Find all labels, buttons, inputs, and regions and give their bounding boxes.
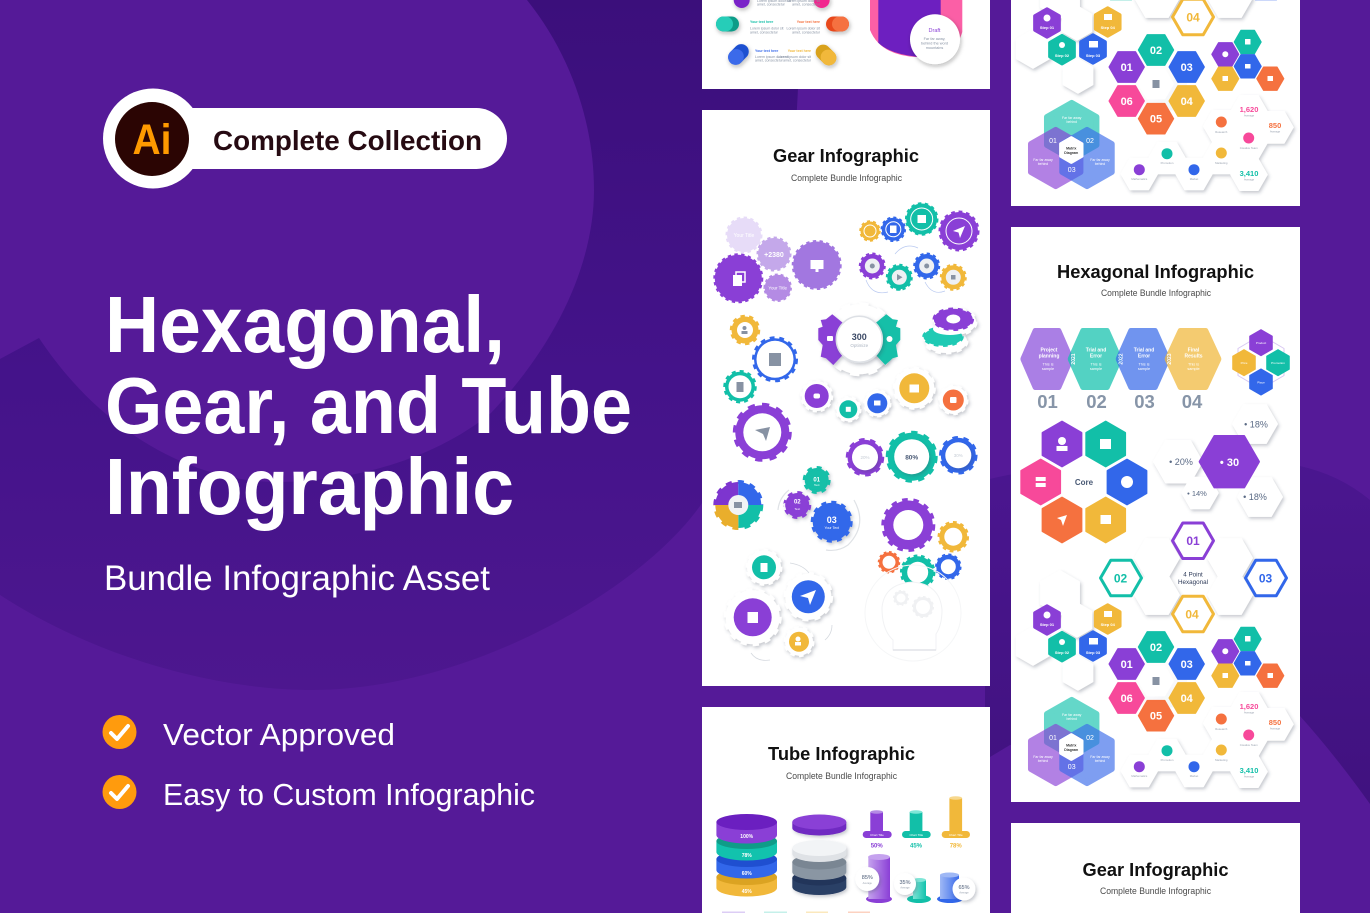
heading: Gear Infographic (773, 146, 919, 166)
timeline hexagons: planning (1039, 354, 1059, 360)
capsule captions: Your text here (755, 49, 778, 53)
gear set: head thinking (865, 500, 967, 661)
gear row: white gears with colour dots (802, 368, 967, 421)
percent hexagons: • 14% (1187, 489, 1207, 498)
title (105, 280, 632, 531)
panel: cropped hexagonal card (1011, 0, 1300, 206)
title: Hexagonal, (105, 280, 505, 369)
capsule captions: amet, consectetur (783, 58, 812, 62)
step hexagons (1017, 0, 1120, 93)
title: Infographic (105, 442, 514, 531)
matrix diagram: Far far away (1090, 158, 1110, 162)
stat hexagons (1121, 96, 1293, 190)
stat hexagons: Average (1244, 710, 1255, 714)
numbered hexagons: 02 (1150, 642, 1162, 654)
matrix diagram: 01 (1049, 138, 1057, 145)
gear set: 01 02 03: 02 (794, 500, 801, 506)
heading: Hexagonal Infographic (1057, 262, 1254, 282)
timeline numbers: 01 (1037, 391, 1058, 412)
small tube: 50%: 50% (871, 844, 883, 850)
badge: Complete Collection (103, 88, 507, 188)
step hexagons: Step 03 (1086, 650, 1101, 655)
4 point hexagonal: 03 (1259, 572, 1272, 586)
4 point hexagonal: Hexagonal (1178, 579, 1208, 586)
4 point hexagonal: 04 (1185, 608, 1199, 622)
timeline hexagons: Final (1188, 348, 1200, 354)
timeline hexagons: Project (1041, 348, 1058, 354)
timeline hexagons: Results (1184, 354, 1203, 360)
matrix diagram (1031, 103, 1112, 186)
timeline numbers: 03 (1134, 391, 1155, 412)
tube stack: colour (716, 814, 777, 896)
step hexagons: Step 02 (1055, 53, 1070, 58)
hexagon ring diagram: Promotion (1271, 361, 1285, 365)
timeline hexagons: 2021 (1071, 353, 1077, 365)
numbered hexagons: 01 (1121, 659, 1133, 671)
capsule captions: amet, consectetur (792, 2, 821, 6)
stat hexagons: 3,410 (1240, 766, 1258, 775)
timeline hexagons: 2023 (1167, 353, 1173, 365)
stat hexagons: 1,620 (1240, 105, 1258, 114)
hexagon ring diagram: Place (1257, 380, 1265, 384)
gear cluster: faded purple: Your Title (768, 286, 787, 290)
icon: Ai logo (115, 102, 189, 176)
gear: blue building (754, 338, 796, 380)
timeline hexagons: This is (1091, 362, 1102, 366)
gear: 3D stacked (924, 309, 976, 353)
hexagon ring diagram (1233, 330, 1289, 395)
callout: Draft: Far far away, (924, 37, 945, 41)
gear row: percentages: 80% (905, 454, 918, 462)
step hexagons: Step 04 (1101, 622, 1116, 627)
small tube: 45% (902, 810, 931, 850)
percent hexagons: • 30 (1220, 457, 1239, 469)
small tube: 78%: 78% (950, 844, 962, 850)
subheading: Complete Bundle Infographic (791, 173, 902, 183)
timeline hexagons: Trial and (1086, 348, 1106, 354)
matrix diagram: 02 (1086, 138, 1094, 145)
gear: purple arrow (735, 405, 789, 459)
panel: Gear Infographic (702, 110, 990, 686)
numbered hexagons: 03 (1181, 62, 1193, 74)
numbered hexagons: 02 (1150, 45, 1162, 57)
subtitle: Bundle Infographic Asset (104, 559, 490, 598)
stat hexagons: Average (1244, 774, 1255, 778)
matrix diagram: 02 (1086, 735, 1094, 742)
stat hexagons: Marketing (1215, 758, 1228, 762)
gear set: 01 02 03: Your Text (824, 526, 839, 530)
timeline hexagons: sample (1042, 367, 1054, 371)
capsule captions (750, 0, 821, 62)
big tube: 35%: 35% (899, 880, 911, 886)
capsule captions: amet, consectetur (757, 2, 786, 6)
4 point hexagonal: 01 (1186, 534, 1200, 548)
gear: four colour wheel (715, 482, 761, 528)
numbered hexagons: 05 (1150, 114, 1162, 126)
gear: 300 Optimize: 300 (852, 332, 867, 342)
timeline hexagons: This is (1188, 362, 1199, 366)
matrix diagram: Far far away (1033, 158, 1053, 162)
stat hexagons: 850 (1269, 121, 1281, 130)
heading: Tube Infographic (768, 744, 915, 764)
timeline hexagons: Error (1138, 354, 1150, 360)
panel: Hexagonal Infographic (1011, 227, 1300, 802)
percent hexagons: • 18% (1244, 420, 1268, 430)
gear cluster: faded purple: +2380 (764, 252, 784, 259)
hexagon ring diagram: Price (1241, 361, 1248, 365)
step hexagons: Step 01 (1040, 25, 1055, 30)
matrix diagram: Far far away (1033, 755, 1053, 759)
panel: cropped timeline card (702, 0, 990, 89)
subheading: Complete Bundle Infographic (1101, 288, 1211, 298)
core hexagon flower: Core (1075, 478, 1094, 487)
stat hexagons: 1,620 (1240, 702, 1258, 711)
gear cluster: faded purple (715, 218, 840, 302)
gear: yellow person (732, 316, 758, 344)
gear set: 01 02 03: Text (814, 483, 820, 487)
capsule captions: Lorem ipsum dolor sit (787, 26, 820, 30)
callout: Draft (910, 14, 960, 64)
matrix diagram: Diagram (1064, 151, 1078, 155)
callout: Draft: behind the word (921, 42, 948, 46)
matrix diagram: behind (1038, 162, 1048, 166)
stat hexagons: Market (1190, 177, 1198, 181)
tube stack: colour: 100% (740, 834, 754, 840)
tube stack: colour: 60% (742, 871, 752, 877)
capsule captions: Your text here (788, 49, 811, 53)
hexagon groups repeated (1017, 0, 1293, 190)
callout: Draft: Draft (929, 28, 941, 34)
big tube: 35%: Average (900, 886, 910, 890)
gear set: 01 02 03: 01 (813, 478, 821, 484)
capsule captions: amet, consectetur (755, 58, 784, 62)
numbered hexagons: 03 (1181, 659, 1193, 671)
stat hexagons: Market (1190, 774, 1198, 778)
big tube: 35% (894, 873, 931, 903)
heading: Gear Infographic (1082, 860, 1228, 880)
small tube: 78% (942, 796, 970, 850)
capsule captions: amet, consectetur (792, 30, 821, 34)
stat hexagons: Average (1270, 130, 1281, 134)
timeline hexagons: sample (1187, 367, 1200, 371)
stat hexagons (1121, 693, 1293, 787)
stat hexagons: Average (1244, 178, 1255, 182)
stat hexagons: Mathematics (1131, 774, 1148, 778)
4 point hexagonal: 02 (1114, 572, 1127, 586)
4 point hexagonal: 04 (1186, 10, 1200, 24)
matrix diagram: 03 (1068, 167, 1076, 174)
step hexagons: Step 02 (1055, 650, 1070, 655)
numbered hexagons: 05 (1150, 710, 1162, 722)
timeline hexagons: Trial and (1134, 348, 1154, 354)
gear row: percentages: 30% (954, 453, 963, 458)
step hexagons: Step 03 (1086, 53, 1101, 58)
small icon hexagons (1212, 30, 1284, 90)
stat hexagons: Research (1215, 727, 1228, 731)
small tube: 45%: 45% (910, 844, 923, 850)
cropped legend tabs (722, 912, 870, 913)
capsule captions: Your text here (750, 20, 773, 24)
tube stack: colour: 78% (742, 853, 752, 859)
numbered hexagons: 01 (1121, 62, 1133, 74)
capsule captions: Lorem ipsum dolor sit (755, 55, 788, 59)
big tube: 65%: Average (959, 892, 969, 894)
numbered hexagons: 06 (1121, 96, 1133, 108)
stat hexagons: Creative Team (1240, 146, 1258, 150)
big tube: 65% (937, 872, 976, 903)
matrix diagram: Diagram (1064, 748, 1078, 752)
numbered hexagons (1109, 35, 1204, 134)
matrix diagram: 03 (1068, 764, 1076, 771)
numbered hexagons: 04 (1181, 693, 1194, 705)
tube stack: grey (792, 814, 846, 895)
matrix diagram: behind (1095, 162, 1105, 166)
matrix diagram: 01 (1049, 735, 1057, 742)
callout: Draft: mountains (926, 46, 943, 50)
gear: 300 Optimize: Optimize (850, 343, 869, 348)
stat hexagons: Marketing (1215, 161, 1228, 165)
panel: cropped Gear Infographic (1011, 823, 1300, 913)
4 point hexagonal (1100, 523, 1286, 632)
small tube: 45%: Chart Title (909, 833, 923, 837)
stat hexagons: 850 (1269, 718, 1281, 727)
matrix diagram: behind (1095, 759, 1105, 763)
matrix diagram: behind (1038, 759, 1048, 763)
matrix diagram (1031, 700, 1112, 783)
percent hexagons: • 20% (1169, 457, 1193, 467)
gear row: percentages (848, 433, 976, 481)
big tube: 85% (855, 854, 892, 903)
timeline numbers: 02 (1086, 391, 1107, 412)
hexagon ring diagram: Product (1256, 341, 1266, 345)
matrix diagram: Matrix (1066, 744, 1077, 748)
stat hexagons: Promotion (1161, 161, 1174, 165)
stat hexagons: Creative Team (1240, 743, 1258, 747)
gear set: white gears with icons (726, 550, 832, 660)
big tube: 65%: 65% (958, 885, 970, 891)
timeline numbers: 04 (1182, 391, 1203, 412)
timeline hexagons: Error (1090, 354, 1102, 360)
gear cluster: faded purple: Your Title (734, 233, 755, 239)
timeline numbers (1037, 391, 1203, 412)
core hexagon flower (1021, 422, 1146, 542)
numbered hexagons (1109, 632, 1204, 731)
timeline hexagons: sample (1138, 367, 1150, 371)
small tube: 78%: Chart Title (949, 833, 963, 837)
gear row: linked (860, 246, 965, 293)
matrix diagram: Far far away (1062, 116, 1082, 120)
gear: 300 Optimize (818, 304, 900, 374)
gear set: 01 02 03: 03 (827, 515, 837, 525)
title: Gear, and Tube (105, 361, 632, 450)
badge label: Complete Collection (213, 125, 482, 156)
timeline hexagons: This is (1139, 362, 1150, 366)
4 point hexagonal (1100, 0, 1286, 35)
gear set: 01 02 03 (778, 468, 860, 550)
big tube: 85%: Average (863, 882, 873, 885)
subheading: Complete Bundle Infographic (786, 771, 897, 781)
step hexagons: Step 04 (1101, 25, 1116, 30)
matrix diagram: Matrix (1066, 146, 1077, 150)
percent hexagons (1154, 405, 1282, 516)
4 point hexagonal: 4 Point (1183, 572, 1203, 578)
step hexagons (1017, 571, 1120, 690)
small tube: 50% (863, 810, 892, 850)
timeline hexagons: 2022 (1118, 353, 1124, 365)
capsule captions: amet, consectetur (750, 30, 779, 34)
stat hexagons: 3,410 (1240, 169, 1258, 178)
feature: Vector Approved: Vector Approved (163, 717, 395, 752)
small tube: 50%: Chart Title (870, 833, 884, 837)
tube stack: colour: 45% (742, 889, 752, 895)
matrix diagram: behind (1066, 717, 1077, 721)
feature: Easy to Custom Infographic: Easy to Custom Infographic (163, 777, 535, 812)
percent hexagons: • 18% (1243, 492, 1267, 502)
capsule icons (716, 0, 849, 68)
matrix diagram: behind (1066, 120, 1077, 124)
stat hexagons: Average (1244, 114, 1255, 118)
step hexagons: Step 01 (1040, 622, 1055, 627)
stat hexagons: Research (1215, 130, 1228, 134)
stat hexagons: Average (1270, 726, 1281, 730)
matrix diagram: Far far away (1090, 755, 1110, 759)
matrix diagram: Far far away (1062, 713, 1082, 717)
capsule captions: Lorem ipsum dolor sit (778, 55, 811, 59)
gear: teal calculator (725, 372, 755, 402)
subheading: Complete Bundle Infographic (1100, 886, 1211, 896)
timeline hexagons: This is (1043, 362, 1054, 366)
gear row: top right (860, 204, 978, 250)
gear set: 01 02 03: Text (795, 507, 800, 511)
numbered hexagons: 06 (1121, 693, 1133, 705)
small icon hexagons (1212, 627, 1284, 687)
panel: Tube Infographic (702, 707, 990, 913)
icon: Ai logo: Ai (132, 116, 172, 164)
big tube: 85%: 85% (862, 875, 873, 881)
capsule captions: Lorem ipsum dolor sit (750, 26, 783, 30)
tube diagram (870, 0, 962, 57)
gear row: percentages: 20% (860, 455, 870, 460)
stat hexagons: Mathematics (1131, 177, 1148, 181)
timeline hexagons (1023, 331, 1218, 387)
timeline hexagons: sample (1090, 367, 1102, 371)
stat hexagons: Promotion (1161, 758, 1174, 762)
numbered hexagons: 04 (1181, 96, 1194, 108)
capsule captions: Your text here (797, 20, 820, 24)
